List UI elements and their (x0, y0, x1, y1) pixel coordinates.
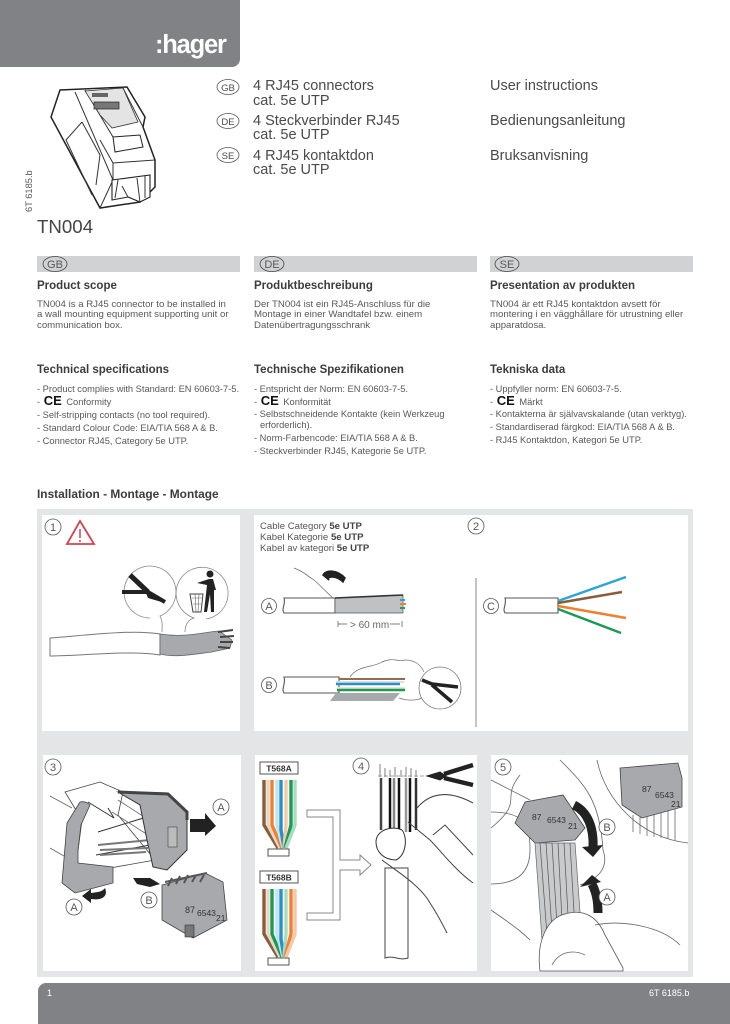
panel: step 5: 87 (532, 812, 542, 822)
document code vertical: 6T 6185.b (24, 170, 34, 212)
panel: step 2: A (265, 601, 273, 613)
language column: SE: - Standardiserad färgkod: EIA/TIA 568 A & B. (490, 422, 675, 432)
panel: step 2: Kabel av kategori 5e UTP (260, 543, 370, 554)
icon: RJ45 connector (51, 87, 155, 208)
panel: step 5: 87 (642, 784, 652, 794)
panel: step 5: 5 (500, 762, 506, 774)
panel: step 5: 21 (671, 799, 681, 809)
language column: SE (490, 256, 693, 445)
panel: step 3: B (145, 895, 153, 907)
panel: step 2: Kabel Kategorie 5e UTP (260, 532, 364, 543)
panel: step 3: A (217, 802, 225, 814)
footer document code: 6T 6185.b (649, 988, 689, 998)
footer page number: 1 (47, 988, 52, 998)
panel: step 3: 87 (185, 905, 195, 915)
language column: SE: SE (500, 259, 514, 271)
language column: SE: Tekniska data (490, 364, 566, 376)
language column: DE: Datenübertragungsschrank (254, 320, 370, 331)
language column: DE: erforderlich). (260, 420, 312, 430)
language column: GB: - Product complies with Standard: EN 60603-7-5. (37, 384, 239, 394)
panel: step 5: B (603, 822, 611, 834)
installation background (37, 509, 693, 977)
titles: DE (217, 113, 625, 143)
footer band (38, 983, 730, 1024)
panel: step 2: Cable Category 5e UTP (260, 521, 362, 532)
titles: GB: User instructions (490, 78, 598, 94)
panel: step 4 (255, 755, 477, 971)
installation heading: Installation - Montage - Montage (37, 487, 219, 501)
language column: SE: montering i en vägghållare för utrustning eller (490, 309, 684, 320)
panel: step 4: T568B (266, 872, 292, 882)
panel: step 2: 2 (473, 521, 479, 533)
language column: DE: Der TN004 ist ein RJ45-Anschluss für die (254, 299, 430, 310)
panel: step 3: A (70, 902, 78, 914)
language column: GB: GB (47, 259, 63, 271)
language column: SE: - CE Märkt (490, 393, 543, 408)
language column: DE: - Norm-Farbencode: EIA/TIA 568 A & B. (254, 433, 418, 443)
panel: step 3: 21 (216, 913, 226, 923)
panel: step 5 (491, 755, 688, 971)
titles: SE: SE (222, 151, 234, 162)
panel: step 5: 6543 (547, 815, 566, 825)
language column: GB: TN004 is a RJ45 connector to be installed in (37, 299, 226, 310)
titles: DE: 4 Steckverbinder RJ45 (253, 113, 400, 129)
titles: GB: GB (221, 83, 235, 94)
language column: DE (254, 256, 477, 456)
language column: GB: - Standard Colour Code: EIA/TIA 568 A & B. (37, 423, 218, 433)
language column: SE: - RJ45 Kontaktdon, Kategori 5e UTP. (490, 435, 642, 445)
panel: step 1: 1 (50, 522, 56, 534)
language column: GB: - CE Conformity (37, 393, 112, 408)
language column: DE: Montage in einer Wandtafel bzw. einem (254, 309, 422, 320)
language column: GB: Technical specifications (37, 364, 169, 376)
panel: step 5: 21 (568, 821, 578, 831)
panel: step 4: 4 (358, 761, 364, 773)
language column: GB: Product scope (37, 280, 117, 292)
language column: SE: Presentation av produkten (490, 280, 635, 292)
panel: step 3 (43, 755, 241, 971)
language column: GB (37, 256, 240, 446)
logo: hager: :hager (155, 31, 227, 59)
language column: DE: Produktbeschreibung (254, 280, 373, 292)
language column: GB: communication box. (37, 320, 123, 331)
titles: DE: cat. 5e UTP (253, 127, 330, 143)
panel: step 1 (42, 515, 240, 731)
panel: step 2: B (265, 680, 273, 692)
language column: DE: - CE Konformität (254, 393, 331, 408)
language column: DE: - Selbstschneidende Kontakte (kein Werkzeug (254, 409, 445, 419)
language column: GB: - Connector RJ45, Category 5e UTP. (37, 436, 188, 446)
titles: SE: Bruksanvisning (490, 148, 588, 164)
language column: SE: - Kontakterna är självavskalande (utan verktyg). (490, 409, 687, 419)
titles: SE: 4 RJ45 kontaktdon (253, 148, 374, 164)
language column: GB: a wall mounting equipment supporting unit or (37, 309, 229, 320)
titles: SE: cat. 5e UTP (253, 162, 330, 178)
panel: step 4: T568A (266, 764, 292, 774)
language column: SE: apparatdosa. (490, 320, 546, 331)
titles: GB: cat. 5e UTP (253, 93, 330, 109)
language column: DE: DE (264, 259, 280, 271)
titles: SE (217, 148, 588, 178)
panel: step 3: 3 (50, 762, 56, 774)
language column: SE: - Uppfyller norm: EN 60603-7-5. (490, 384, 622, 394)
language column: DE: Technische Spezifikationen (254, 364, 404, 376)
titles: DE: DE (221, 117, 235, 128)
titles: GB (217, 78, 598, 109)
panel: step 5: A (603, 892, 611, 904)
panel: step 5: 6543 (655, 790, 674, 800)
panel: step 2: C (487, 601, 495, 613)
titles: DE: Bedienungsanleitung (490, 113, 625, 129)
language column: DE: - Steckverbinder RJ45, Kategorie 5e UTP. (254, 446, 426, 456)
language column: GB: - Self-stripping contacts (no tool required). (37, 410, 210, 420)
language column: SE: TN004 är ett RJ45 kontaktdon avsett för (490, 299, 661, 310)
language column: DE: - Entspricht der Norm: EN 60603-7-5. (254, 384, 408, 394)
panel: step 2 (254, 515, 688, 731)
panel: step 3: 6543 (197, 908, 216, 918)
titles: GB: 4 RJ45 connectors (253, 78, 374, 94)
product code: TN004 (37, 216, 93, 237)
panel: step 2: > 60 mm (350, 620, 389, 631)
header band (0, 0, 240, 67)
